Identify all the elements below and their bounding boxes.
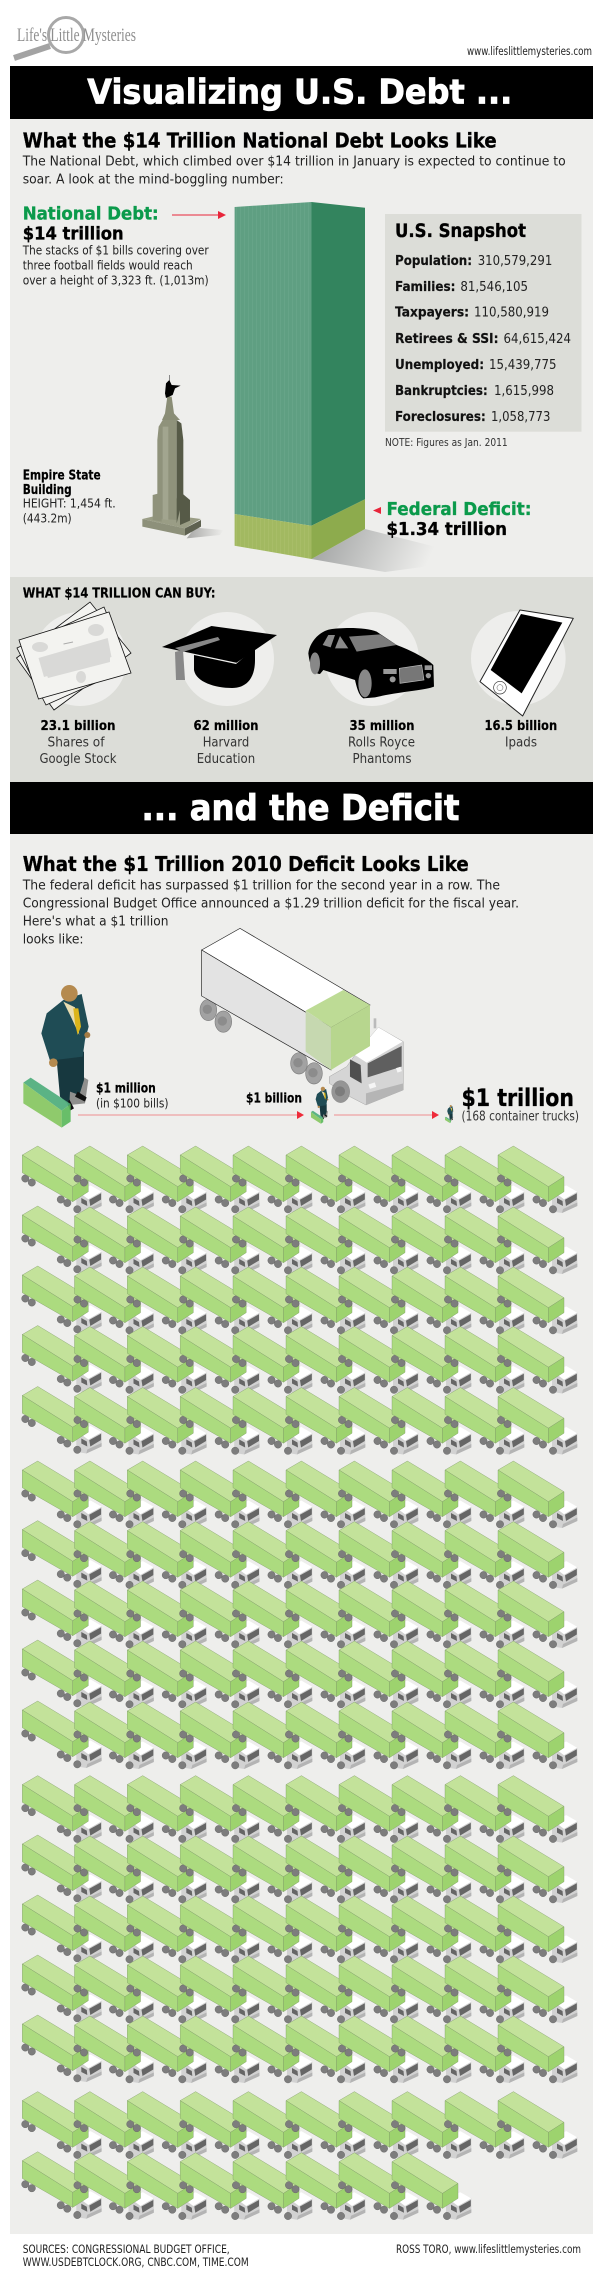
item: harvard education bbox=[194, 719, 258, 767]
panel: U.S. Snapshot bbox=[385, 214, 582, 432]
logo: Life's Little Mysteries: Life's Little Mysteries bbox=[17, 25, 136, 46]
empire state label: HEIGHT: 1,454 ft. bbox=[23, 496, 116, 511]
figure: man with $1 million bbox=[23, 985, 90, 1128]
logo: Life's Little Mysteries bbox=[14, 18, 136, 58]
intro text: national debt: soar. A look at the mind-boggling number: bbox=[23, 172, 284, 188]
panel: U.S. Snapshot: 64,615,424 bbox=[504, 332, 571, 347]
empire state label: (443.2m) bbox=[23, 511, 72, 526]
arrow: to deficit portion bbox=[373, 507, 381, 514]
heading: national debt: What the $14 Trillion National Debt Looks Like bbox=[23, 129, 497, 153]
empire state label bbox=[23, 468, 116, 526]
empire state label: Building bbox=[23, 483, 72, 498]
label: $1 billion: $1 billion bbox=[246, 1091, 302, 1106]
item: google stock: Google Stock bbox=[40, 752, 117, 767]
callout: federal deficit: Federal Deficit: bbox=[386, 499, 532, 520]
item: ipads: Ipads bbox=[505, 736, 537, 751]
label: $1 million: (in $100 bills) bbox=[96, 1095, 168, 1110]
arrow: million to billion bbox=[78, 1111, 304, 1119]
truck row 3 bbox=[22, 1266, 577, 1334]
callout: national debt bbox=[22, 203, 209, 287]
callout: federal deficit: $1.34 trillion bbox=[386, 519, 507, 540]
intro text: national debt bbox=[22, 154, 566, 188]
panel: U.S. Snapshot: Families: bbox=[395, 280, 455, 295]
panel: U.S. Snapshot: 15,439,775 bbox=[489, 358, 556, 373]
truck row 15 bbox=[22, 2015, 577, 2083]
panel: U.S. Snapshot: 81,546,105 bbox=[460, 280, 528, 295]
empire state label: Empire State bbox=[23, 468, 101, 483]
icon: stock certificates bbox=[16, 602, 131, 710]
item: google stock: 23.1 billion bbox=[40, 719, 116, 734]
truck row 16 bbox=[22, 2092, 577, 2159]
intro text: deficit bbox=[22, 877, 519, 947]
panel: what $14 trillion can buy bbox=[10, 577, 593, 782]
title banner bbox=[10, 66, 593, 119]
section banner: and the deficit: ... and the Deficit bbox=[142, 788, 460, 829]
arrow: billion to trillion bbox=[334, 1111, 439, 1119]
panel: U.S. Snapshot: 310,579,291 bbox=[478, 254, 552, 269]
callout: national debt: National Debt: bbox=[23, 203, 159, 224]
panel: U.S. Snapshot: 1,058,773 bbox=[491, 410, 550, 425]
truck row 11 bbox=[22, 1776, 577, 1843]
chart: debt tower bbox=[235, 202, 440, 572]
intro text: deficit: looks like: bbox=[23, 931, 84, 947]
figure: tiny man bbox=[445, 1105, 453, 1123]
truck row 14 bbox=[22, 1955, 577, 2023]
truck row 8 bbox=[22, 1580, 577, 1648]
icon: rolls royce car bbox=[308, 612, 434, 706]
arrow: to debt tower bbox=[172, 211, 226, 219]
panel: U.S. Snapshot: Taxpayers: bbox=[395, 306, 469, 321]
panel: U.S. Snapshot: Foreclosures: bbox=[395, 410, 486, 425]
truck row 7 bbox=[22, 1521, 577, 1589]
icon: graduation cap bbox=[162, 612, 277, 706]
intro text: deficit: The federal deficit has surpassed $1 trillion for the second year in a row. The bbox=[22, 877, 500, 893]
truck row 1 bbox=[22, 1146, 577, 1213]
truck row 12 bbox=[22, 1835, 577, 1903]
item: harvard education: Education bbox=[197, 752, 255, 767]
illustration: container truck bbox=[200, 928, 403, 1105]
truck row 2 bbox=[22, 1206, 577, 1274]
item: ipads: 16.5 billion bbox=[484, 719, 557, 734]
callout: national debt: $14 trillion bbox=[23, 223, 124, 244]
note: NOTE: Figures as Jan. 2011 bbox=[385, 436, 508, 449]
intro text: national debt: The National Debt, which climbed over $14 trillion in January is expected to continue to bbox=[22, 154, 566, 170]
callout: national debt: The stacks of $1 bills covering over bbox=[22, 242, 209, 257]
item: rolls royce phantoms: 35 million bbox=[350, 719, 414, 734]
panel: U.S. Snapshot: U.S. Snapshot bbox=[395, 220, 526, 242]
label: $1 million bbox=[96, 1082, 168, 1110]
intro text: deficit: Congressional Budget Office announced a $1.29 trillion deficit for the fiscal year. bbox=[23, 895, 519, 911]
panel: U.S. Snapshot: 110,580,919 bbox=[474, 306, 549, 321]
label: $1 million: $1 million bbox=[96, 1082, 156, 1097]
panel heading: WHAT $14 TRILLION CAN BUY: bbox=[23, 587, 215, 602]
panel: U.S. Snapshot: 1,615,998 bbox=[494, 384, 554, 399]
panel: U.S. Snapshot: Bankruptcies: bbox=[395, 384, 488, 399]
federal deficit portion bbox=[235, 499, 365, 559]
footer: sources: WWW.USDEBTCLOCK.ORG, CNBC.COM, TIME.COM bbox=[23, 2255, 249, 2269]
icon: empire state building bbox=[142, 375, 223, 538]
footer: sources: SOURCES: CONGRESSIONAL BUDGET OFFICE, bbox=[23, 2242, 230, 2256]
footer: sources bbox=[23, 2242, 249, 2269]
callout: national debt: over a height of 3,323 ft. (1,013m) bbox=[23, 272, 209, 287]
label: $1 trillion: $1 trillion bbox=[462, 1084, 574, 1112]
item: google stock: Shares of bbox=[48, 736, 105, 751]
item: google stock bbox=[40, 719, 117, 767]
icon: ipad bbox=[471, 610, 573, 716]
callout: national debt: three football fields would reach bbox=[23, 257, 193, 272]
truck row 13 bbox=[22, 1895, 577, 1963]
item: rolls royce phantoms: Rolls Royce bbox=[348, 736, 415, 751]
label: $1 trillion bbox=[462, 1084, 579, 1125]
truck row 4 bbox=[22, 1326, 577, 1394]
truck row 6 bbox=[22, 1461, 577, 1528]
truck row 17 bbox=[22, 2152, 471, 2220]
truck row 9 bbox=[22, 1640, 577, 1708]
item: ipads bbox=[484, 719, 557, 751]
panel: U.S. Snapshot: Retirees & SSI: bbox=[395, 332, 498, 347]
item: rolls royce phantoms: Phantoms bbox=[352, 752, 412, 767]
truck row 10 bbox=[22, 1701, 577, 1769]
heading: deficit: What the $1 Trillion 2010 Deficit Looks Like bbox=[23, 852, 469, 876]
section banner: and the deficit bbox=[10, 782, 593, 834]
chart: 168 container trucks bbox=[22, 1146, 577, 2220]
deficit share of truck bbox=[306, 990, 370, 1070]
title banner: Visualizing U.S. Debt ... bbox=[87, 72, 512, 112]
item: harvard education: Harvard bbox=[203, 736, 249, 751]
panel: U.S. Snapshot: Unemployed: bbox=[395, 358, 484, 373]
callout: federal deficit bbox=[386, 499, 532, 540]
truck row 5 bbox=[22, 1386, 577, 1454]
panel: U.S. Snapshot: Population: bbox=[395, 254, 472, 269]
figure: small man bbox=[311, 1087, 328, 1124]
item: rolls royce phantoms bbox=[348, 719, 415, 767]
intro text: deficit: Here's what a $1 trillion bbox=[23, 913, 169, 929]
item: harvard education: 62 million bbox=[194, 719, 258, 734]
